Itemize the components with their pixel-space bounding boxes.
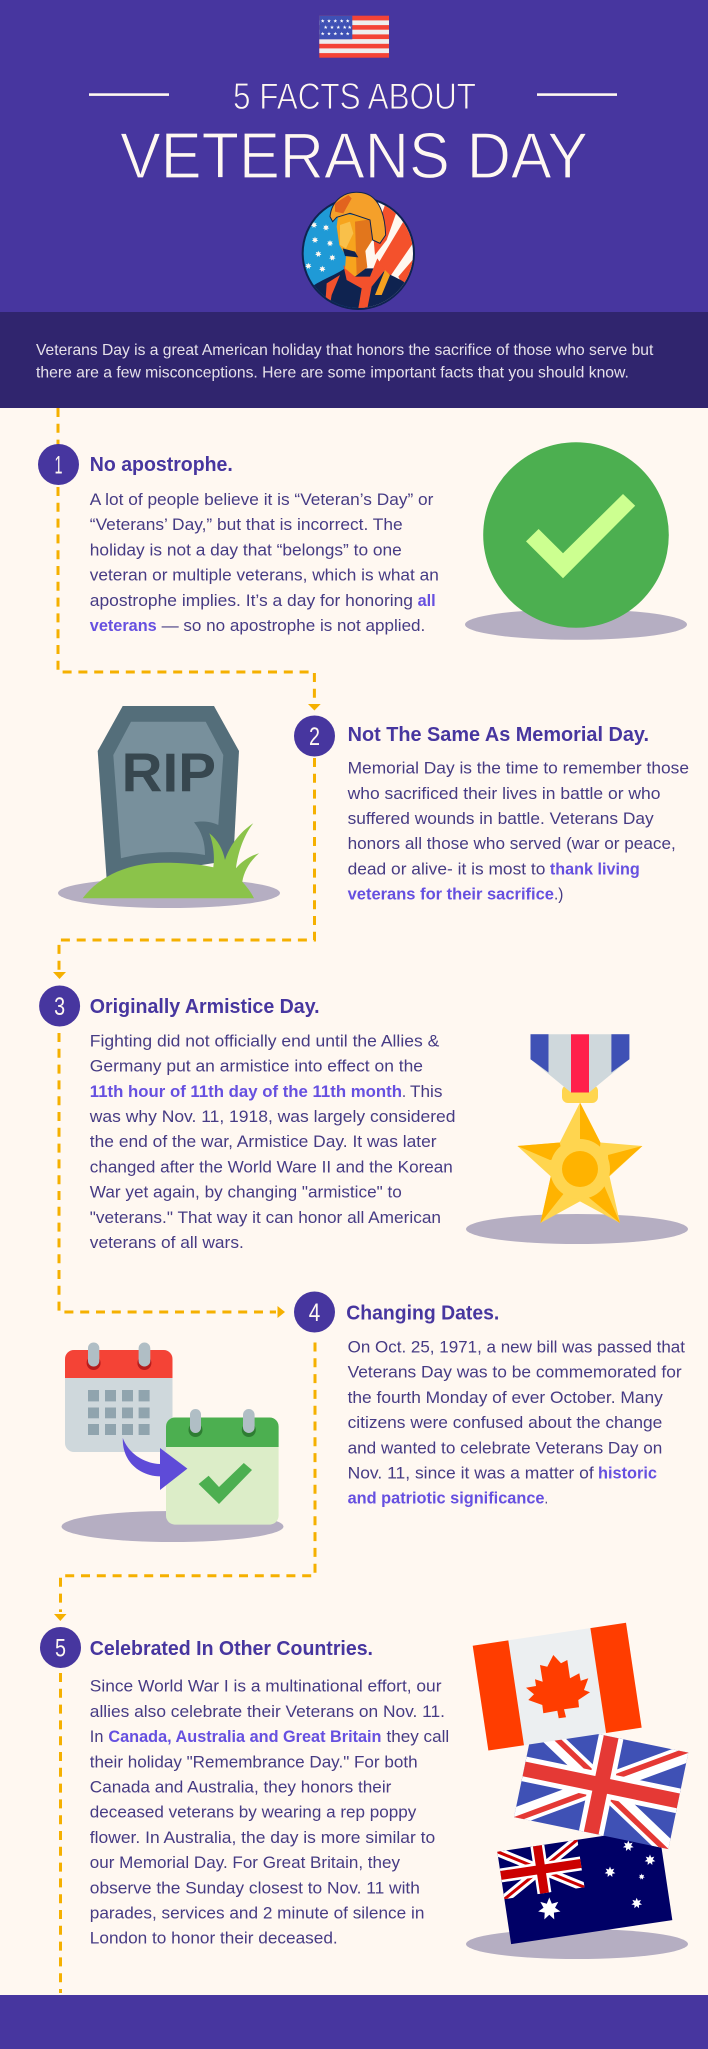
body text 2: dead or alive- it is most to — [348, 859, 545, 878]
icon: tombstone: RIP — [122, 742, 216, 804]
number badge 2: 2 — [309, 723, 320, 751]
heading: changing dates: Changing Dates. — [346, 1303, 499, 1325]
fact 1 — [38, 442, 687, 640]
flag: canada — [473, 1623, 642, 1751]
number badge 1 — [38, 444, 79, 485]
body text 4: Veterans Day was to be commemorated for — [348, 1363, 682, 1382]
number badge 5: 5 — [55, 1634, 66, 1662]
body text 3: War yet again, by changing "armistice" to — [90, 1183, 402, 1202]
intro band — [0, 312, 708, 408]
body text 5 — [90, 1677, 449, 1948]
body text 5: London to honor their deceased. — [90, 1929, 338, 1948]
number badge 1: 1 — [54, 452, 62, 480]
body text 5: Since World War I is a multinational effort, our — [90, 1677, 442, 1696]
body text 3: "veterans." That way it can honor all American — [90, 1208, 441, 1227]
body text 5: allies also celebrate their Veterans on Nov. 11. — [90, 1702, 445, 1721]
body text 3: was why Nov. 11, 1918, was largely considered — [89, 1107, 455, 1126]
body text 3: the end of the war, Armistice Day. It was later — [90, 1132, 437, 1151]
icon: american flag — [319, 16, 389, 58]
body text 2: honors all those who served (war or peace, — [348, 834, 676, 853]
body text 4: citizens were confused about the change — [348, 1413, 662, 1432]
body text 5: parades, services and 2 minute of silence in — [90, 1904, 424, 1922]
body text 5: Canada and Australia, they honors their — [90, 1778, 392, 1796]
footer band — [0, 1995, 708, 2049]
body text 1: “Veterans’ Day,” but that is incorrect. The — [90, 515, 403, 534]
fact 4 — [62, 1292, 685, 1542]
body text 2: Memorial Day is the time to remember those — [348, 759, 689, 778]
title: 5 facts about: 5 FACTS ABOUT — [233, 75, 476, 117]
body text 5: flower. In Australia, the day is more similar to — [90, 1828, 435, 1847]
body text 2: who sacrificed their lives in battle or who — [347, 784, 660, 803]
body text 3 — [89, 1031, 455, 1252]
body text 4: and patriotic significance — [348, 1489, 544, 1508]
number badge 2 — [294, 716, 335, 756]
icon: tombstone — [58, 706, 280, 908]
number badge 3: 3 — [54, 993, 65, 1021]
body text 2: veterans for their sacrifice — [348, 885, 554, 904]
body text 4: historic — [598, 1464, 657, 1482]
body text 3: Fighting did not officially end until the Allies & — [90, 1031, 439, 1050]
body text 4: Nov. 11, since it was a matter of — [348, 1464, 594, 1482]
body text 4: . — [544, 1489, 548, 1508]
body text 5: In — [90, 1727, 103, 1746]
body text 4: and wanted to celebrate Veterans Day on — [348, 1438, 662, 1457]
body text 3: veterans of all wars. — [90, 1233, 244, 1252]
fact 3 — [39, 986, 688, 1252]
number badge 4: 4 — [309, 1299, 320, 1327]
icon: medal — [466, 1034, 688, 1244]
heading: celebrated in other countries: Celebrated In Other Countries. — [90, 1638, 373, 1660]
left title rule — [89, 93, 169, 96]
body text 1: — so no apostrophe is not applied. — [162, 616, 425, 635]
title: veterans day: VETERANS DAY — [120, 120, 588, 192]
fact 2 — [58, 706, 689, 908]
body text 1: veterans — [90, 616, 157, 635]
body text 1: all — [418, 591, 436, 610]
icon: soldier portrait — [300, 192, 417, 313]
body text 1: veteran or multiple veterans, which is what an — [90, 566, 439, 585]
body text 5: our Memorial Day. For Great Britain, they — [90, 1853, 401, 1872]
intro text: there are a few misconceptions. Here are some important facts that you should know. — [36, 364, 629, 381]
body text 3: Germany put an armistice into effect on the — [90, 1057, 423, 1076]
right title rule — [537, 93, 617, 96]
body text 4: On Oct. 25, 1971, a new bill was passed that — [348, 1338, 685, 1356]
heading: originally armistice day: Originally Armistice Day. — [90, 996, 320, 1018]
body text 2: thank living — [550, 859, 640, 878]
body text 2: suffered wounds in battle. Veterans Day — [348, 809, 654, 828]
dashed connector path — [53, 408, 321, 1993]
number badge 3 — [39, 986, 80, 1026]
body text 5: Canada, Australia and Great Britain — [108, 1727, 382, 1746]
flag: united kingdom — [514, 1734, 688, 1850]
body text 1: holiday is not a day that “belongs” to one — [90, 540, 402, 559]
body text 3: . — [402, 1082, 406, 1101]
body text 4 — [348, 1338, 685, 1508]
heading: no apostrophe: No apostrophe. — [90, 454, 233, 476]
body text 5: they call — [386, 1727, 449, 1746]
body text 5: observe the Sunday closest to Nov. 11 with — [90, 1878, 420, 1897]
icon: stacked flags — [466, 1623, 689, 1959]
body text 3: changed after the World Ware II and the Korean — [90, 1157, 453, 1176]
header panel — [0, 0, 708, 313]
flag: australia — [497, 1828, 672, 1944]
icon: green check — [465, 442, 687, 640]
intro text: Veterans Day is a great American holiday that honors the sacrifice of those who serve but — [36, 342, 654, 359]
heading: not the same as memorial day: Not The Same As Memorial Day. — [348, 724, 649, 746]
body text 1: A lot of people believe it is “Veteran’s Day” or — [90, 490, 434, 509]
body text 3: This — [410, 1082, 442, 1101]
body text 1: apostrophe implies. It’s a day for honoring — [90, 591, 413, 610]
number badge 4 — [294, 1292, 335, 1332]
number badge 5 — [40, 1627, 81, 1668]
body text 4: the fourth Monday of ever October. Many — [348, 1388, 664, 1407]
body text 2 — [347, 759, 689, 904]
body text 5: their holiday "Remembrance Day." For both — [90, 1752, 418, 1771]
body text 1 — [90, 490, 439, 635]
body text 2: .) — [554, 885, 563, 904]
icon: calendars — [62, 1342, 284, 1542]
body text 3: 11th hour of 11th day of the 11th month — [90, 1082, 402, 1101]
intro text — [36, 342, 654, 381]
fact 5 — [40, 1623, 689, 1959]
body text 5: deceased veterans by wearing a rep poppy — [90, 1803, 417, 1822]
